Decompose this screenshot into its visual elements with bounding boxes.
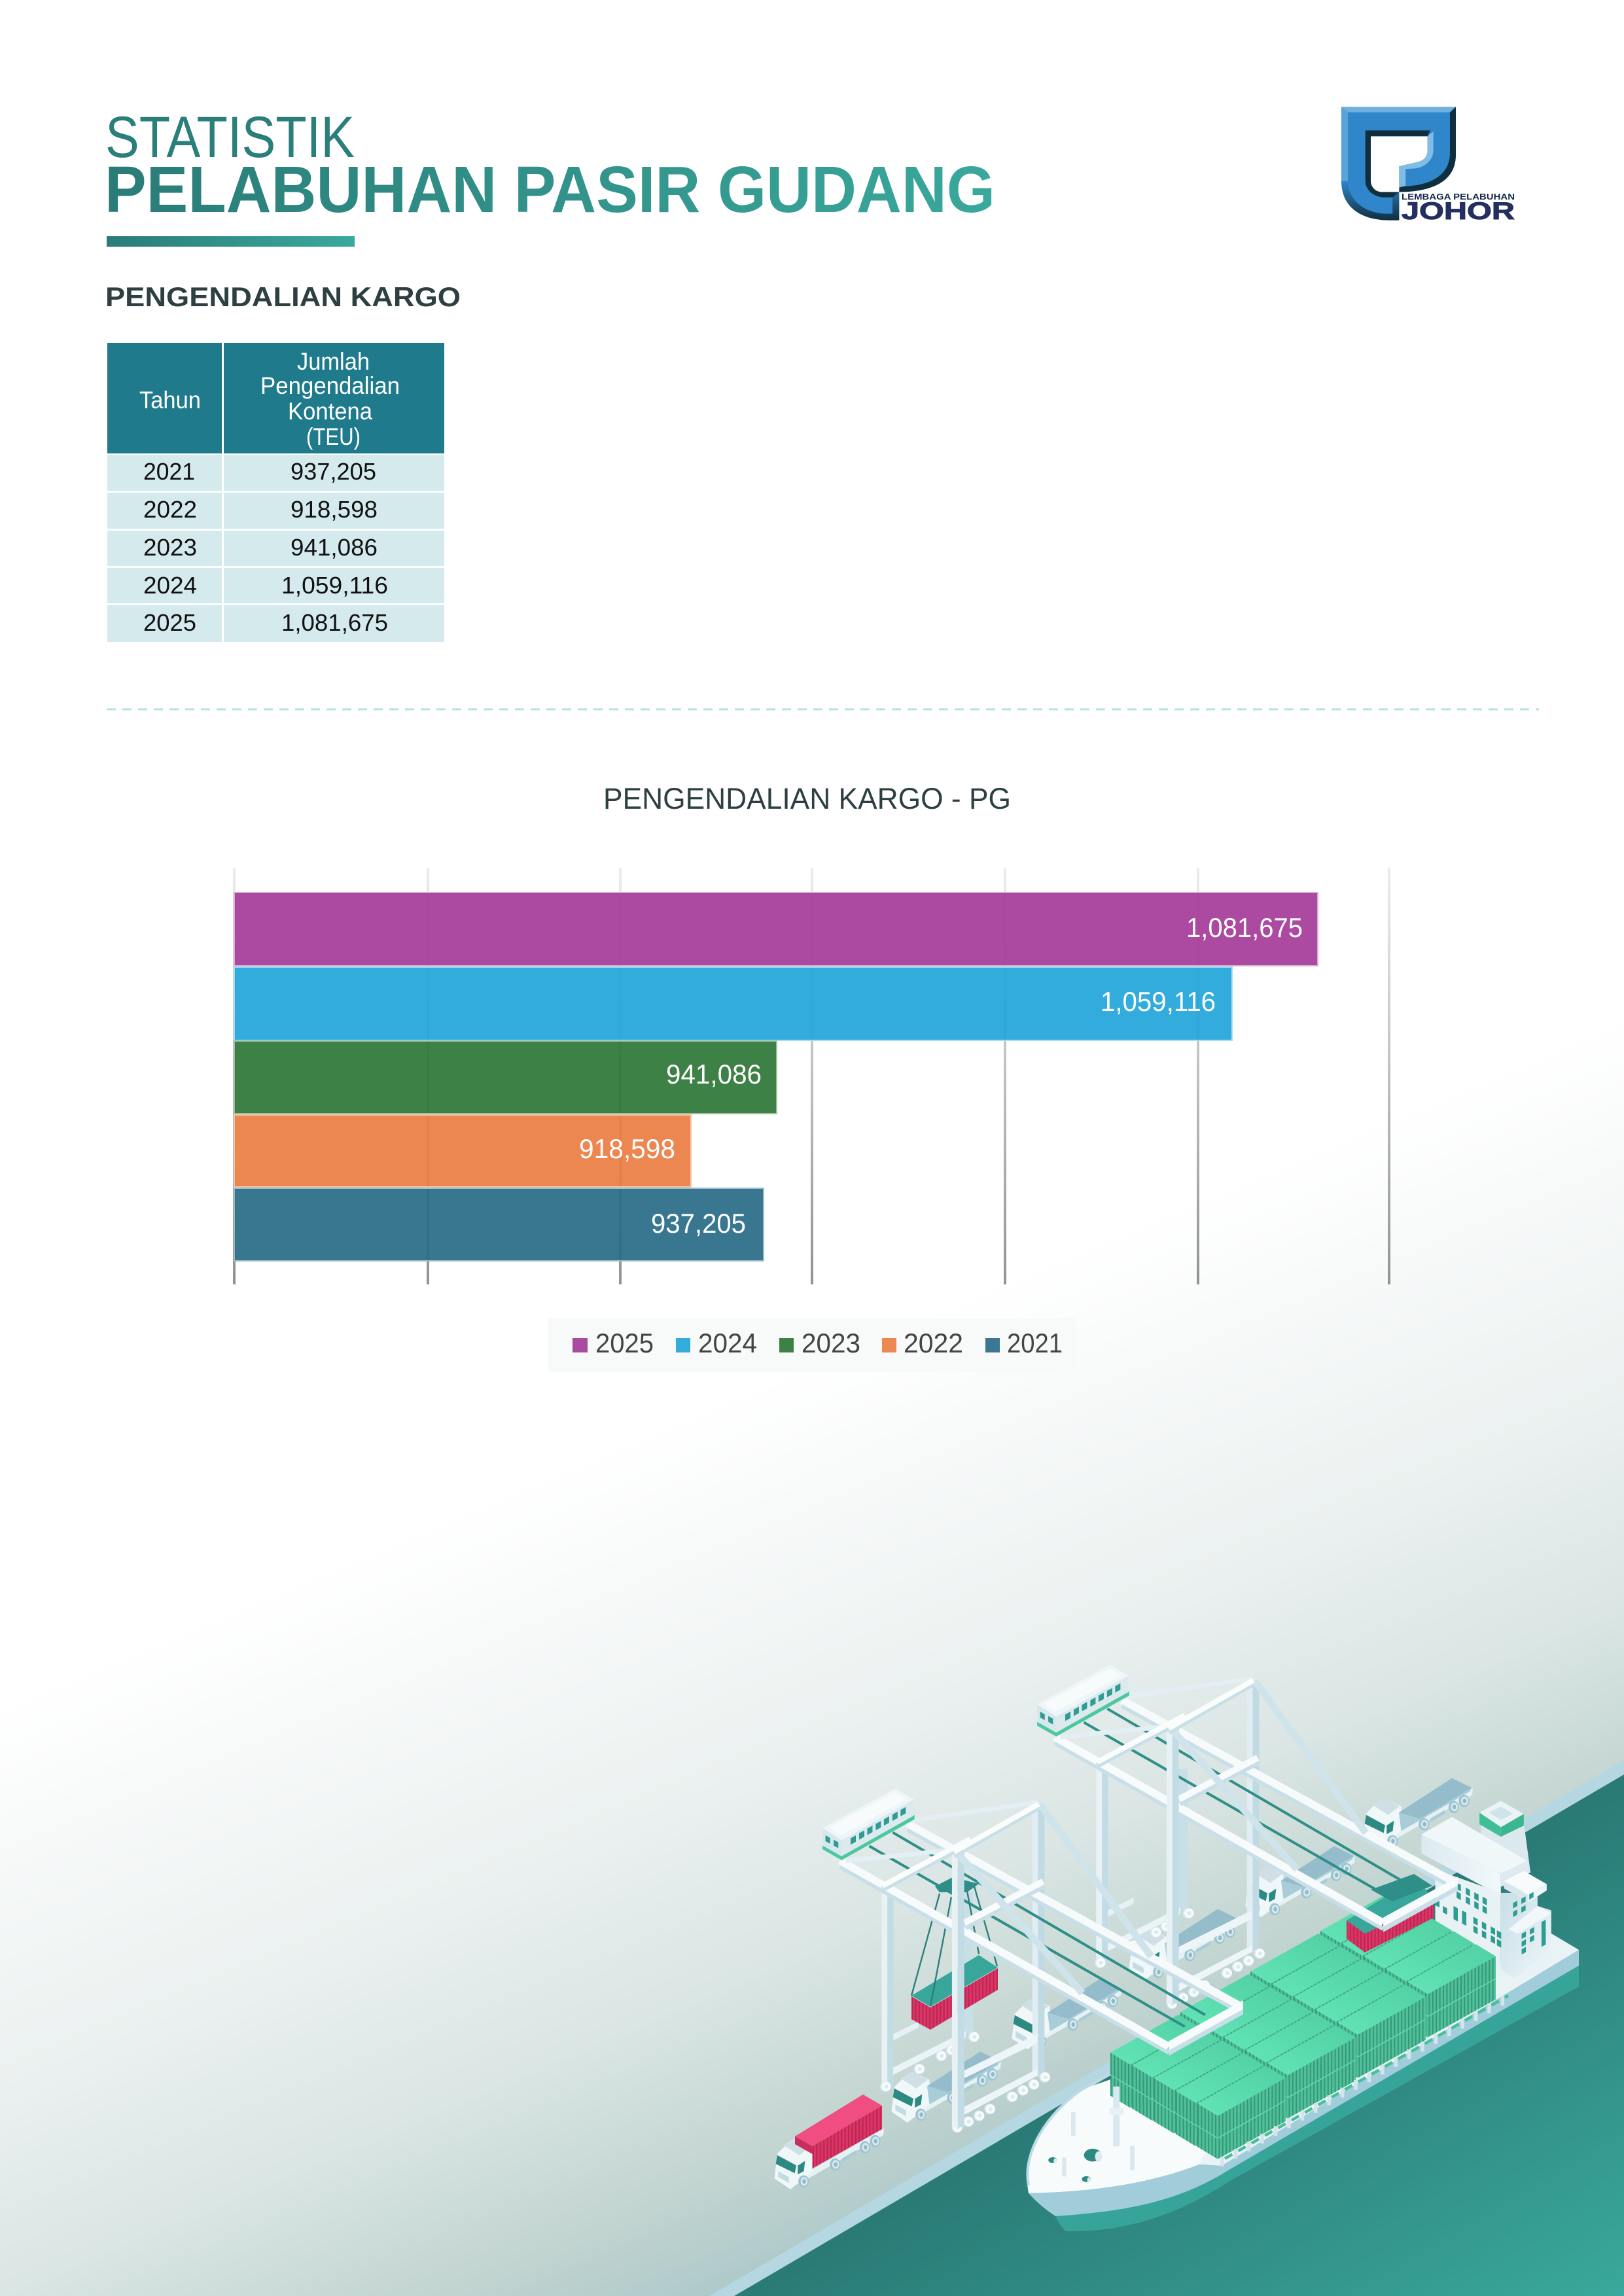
bar chart: [233, 868, 1390, 1284]
bar: 2025: [234, 892, 1318, 966]
table header: [107, 343, 444, 453]
bar: 2025: 1,081,675: [1186, 912, 1303, 943]
chart legend: 2025: [595, 1328, 654, 1358]
chart legend: 2021: [1007, 1328, 1063, 1358]
title: STATISTIK: [105, 104, 355, 169]
illustration: container port: [709, 1665, 1624, 2296]
crane 1 hoisted container: [911, 1877, 998, 2030]
bar: 2024: 1,059,116: [1101, 986, 1216, 1017]
table header: Tahun: [139, 387, 201, 414]
title: [105, 104, 995, 226]
bar: 2021: [234, 1188, 764, 1261]
table rows: 2023: [143, 534, 197, 561]
container ship: [1027, 1801, 1579, 2231]
icon: Lembaga Pelabuhan Johor logo: LEMBAGA PELABUHAN: [1402, 192, 1515, 202]
bar: 2023: 941,086: [666, 1059, 762, 1089]
ship superstructure: [1421, 1801, 1551, 1978]
chart legend: 2024: [698, 1328, 757, 1358]
crane 1: [815, 1788, 1243, 2132]
table rows: 918,598: [291, 496, 378, 523]
ship hull: [1027, 1934, 1579, 2231]
table header: Jumlah: [297, 348, 370, 375]
table rows: 941,086: [291, 534, 378, 561]
table header: Pengendalian: [260, 372, 400, 399]
title underline bar: [107, 236, 355, 247]
bow deck equipment: [1048, 2087, 1135, 2183]
data table: [107, 343, 444, 642]
icon: Lembaga Pelabuhan Johor logo: JOHOR: [1402, 198, 1515, 224]
bar: 2024: [234, 967, 1232, 1040]
table rows: 2021: [143, 458, 195, 485]
ship cargo containers: [1110, 1893, 1496, 2159]
icon: Lembaga Pelabuhan Johor logo: [1341, 107, 1515, 224]
chart legend: 2023: [802, 1328, 860, 1358]
table header: (TEU): [306, 423, 361, 450]
table rows: [107, 455, 444, 642]
chart legend: [548, 1318, 1076, 1372]
table rows: 2022: [143, 496, 197, 523]
table rows: 1,081,675: [281, 609, 388, 636]
title: PELABUHAN PASIR GUDANG: [105, 153, 995, 226]
bar: 2022: 918,598: [579, 1133, 675, 1164]
table rows: 1,059,116: [281, 572, 388, 599]
table rows: 937,205: [291, 458, 376, 485]
bar: 2021: 937,205: [651, 1208, 746, 1239]
bar: 2022: [234, 1115, 691, 1187]
bar: 2023: [234, 1041, 777, 1114]
trucks on the quay: [891, 1778, 1473, 2123]
ship railing: [1222, 1996, 1508, 2166]
chart title: PENGENDALIAN KARGO - PG: [603, 782, 1011, 815]
crane 2: [1030, 1665, 1458, 2009]
table rows: 2024: [143, 572, 197, 599]
table rows: 2025: [143, 609, 196, 636]
water: [734, 1775, 1624, 2296]
quay edge: [709, 1760, 1624, 2296]
red container truck: [774, 2094, 884, 2189]
heading: Pengendalian Kargo: PENGENDALIAN KARGO: [105, 281, 461, 312]
crane 2 hoisted container: [1347, 1874, 1434, 1952]
chart legend: 2022: [904, 1328, 963, 1358]
table header: Kontena: [288, 398, 372, 425]
